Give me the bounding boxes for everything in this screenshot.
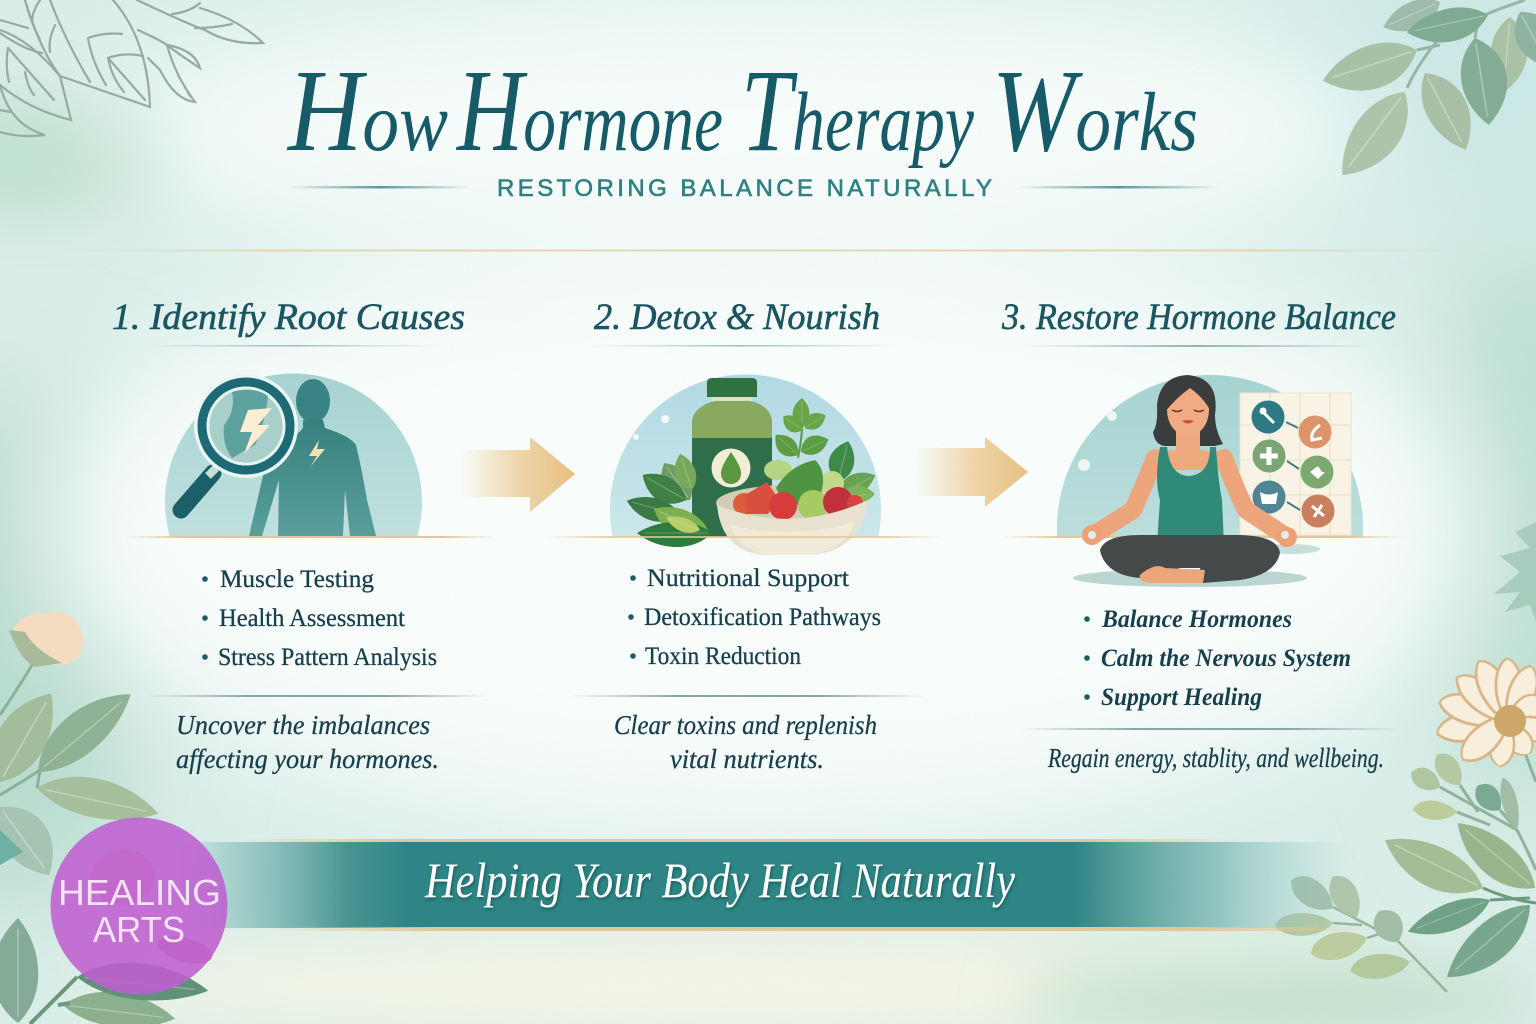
icon: faded green flower at right edge — [1494, 522, 1536, 622]
heading: step 1: 1. Identify Root Causes — [112, 297, 465, 338]
botanical: top-left line-art leaves — [0, 0, 263, 136]
logo: healing arts badge — [50, 818, 228, 994]
icon: body silhouette with magnifying glass — [165, 374, 422, 537]
list: step 2 bullets: Detoxification Pathways — [644, 604, 881, 631]
title: Therapy — [741, 45, 975, 176]
caption: step 1: Uncover the imbalances — [176, 710, 430, 740]
list: step 1 bullets: Health Assessment — [219, 605, 405, 632]
leaves left of bottle — [624, 451, 715, 549]
botanical: top-right leaf branch — [1317, 0, 1536, 190]
heading: step 3: 3. Restore Hormone Balance — [1001, 297, 1396, 338]
caption: step 1 — [176, 710, 439, 774]
botanical: bottom-left flower and leaves — [0, 612, 215, 1024]
subtitle with rules: RESTORING BALANCE NATURALLY — [497, 175, 992, 202]
list: step 2 bullets — [628, 565, 881, 670]
caption: step 2 — [614, 710, 877, 774]
arrow: step 1 to step 2 — [460, 437, 575, 512]
list: step 2 bullets: Toxin Reduction — [645, 643, 801, 670]
caption: step 3: Regain energy, stablity, and wellbeing. — [1047, 743, 1384, 773]
list: step 3 bullets: Support Healing — [1101, 684, 1262, 711]
caption: step 1: affecting your hormones. — [176, 744, 439, 774]
list: step 3 bullets — [1084, 606, 1351, 711]
figure: woman — [1082, 375, 1297, 583]
panel: step 2 detox and nourish — [545, 297, 945, 774]
flower: peach blossom — [9, 612, 83, 667]
title — [286, 45, 1198, 176]
icon: meditating woman with hormone chart — [1005, 375, 1400, 587]
list: step 1 bullets: Muscle Testing — [220, 566, 375, 593]
list: step 3 bullets: Balance Hormones — [1101, 606, 1292, 633]
list: step 1 bullets — [202, 566, 437, 671]
logo: healing arts badge: HEALING — [58, 872, 221, 913]
arrow: step 2 to step 3 — [915, 437, 1028, 507]
banner — [170, 839, 1370, 931]
title: Hormone — [455, 45, 723, 176]
logo: healing arts badge: ARTS — [93, 909, 185, 950]
title: How — [286, 45, 448, 176]
title: Works — [992, 45, 1198, 176]
herb sprig — [769, 398, 832, 463]
botanical: right daisy and leaves — [1275, 522, 1536, 994]
chart: hormone icons card — [1240, 393, 1351, 535]
list: step 1 bullets: Stress Pattern Analysis — [218, 644, 437, 671]
banner: Helping Your Body Heal Naturally — [424, 852, 1016, 908]
icon: daisy — [1436, 655, 1536, 769]
list: step 2 bullets: Nutritional Support — [647, 565, 849, 592]
list: step 3 bullets: Calm the Nervous System — [1101, 645, 1351, 672]
caption: step 2: Clear toxins and replenish — [614, 710, 877, 740]
panel: step 3 restore hormone balance — [1000, 297, 1405, 773]
icon: supplement bottle with salad bowl — [610, 374, 881, 555]
caption: step 2: vital nutrients. — [670, 744, 824, 774]
panel: step 1 identify root causes — [112, 297, 497, 774]
heading: step 2: 2. Detox & Nourish — [594, 297, 880, 338]
